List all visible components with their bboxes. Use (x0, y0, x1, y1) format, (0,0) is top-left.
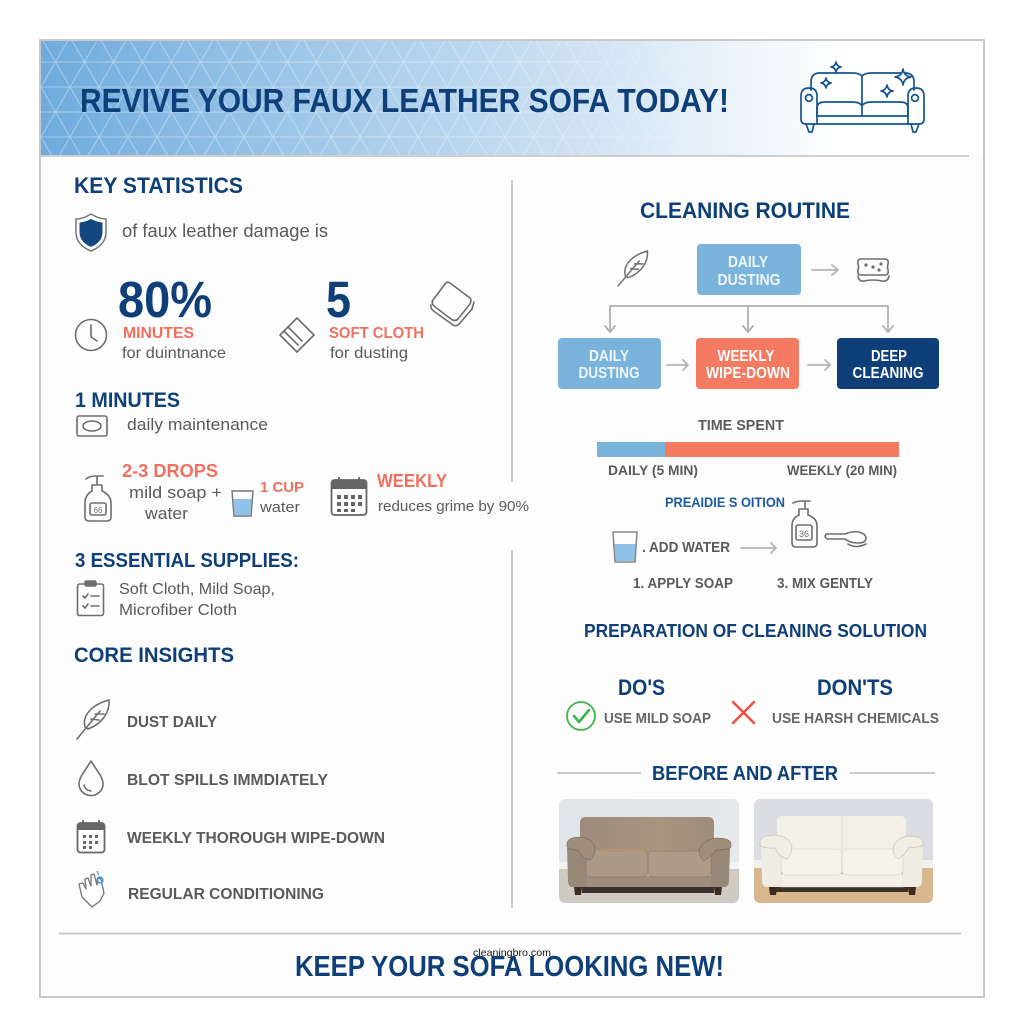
heading: key statistics: KEY STATISTICS (74, 173, 243, 198)
arrow (741, 543, 776, 553)
icon: water drop (79, 761, 103, 796)
panel: preparation steps (584, 494, 927, 641)
stat: 80 percent: 80% (118, 271, 212, 328)
photo: worn sofa before (559, 799, 739, 903)
icon: folded cloth (280, 318, 314, 352)
heading: before and after: BEFORE AND AFTER (652, 763, 839, 785)
column divider (511, 180, 513, 908)
stat: soap dose (85, 461, 222, 523)
label: soft cloth: SOFT CLOTH (329, 325, 424, 342)
heading: preparation: PREPARATION OF CLEANING SOLUTION (584, 621, 927, 641)
stat: weekly: reduces grime by 90% (378, 498, 529, 515)
header banner (41, 41, 983, 157)
icon: clock (76, 320, 106, 350)
stat: weekly: WEEKLY (377, 471, 447, 491)
label: minutes: MINUTES (123, 325, 194, 342)
stat: one cup of water: 1 CUP (260, 479, 304, 496)
icon: sofa with sparkles (801, 62, 924, 132)
flow box: deep cleaning: DEEP (871, 348, 907, 365)
stat: 1 minutes daily maintenance: daily maintenance (127, 415, 268, 434)
stat: 1 minutes daily maintenance: 1 MINUTES (75, 389, 180, 412)
icon: checklist clipboard (78, 581, 104, 616)
connector arrows (605, 306, 893, 332)
flow box: deep cleaning (837, 338, 939, 389)
flow box: daily dusting: DAILY (589, 348, 630, 365)
step: mix gently: 3. MIX GENTLY (777, 576, 873, 592)
text: use harsh chemicals: USE HARSH CHEMICALS (772, 710, 939, 727)
flow box: weekly wipe-down: WIPE-DOWN (706, 365, 790, 382)
flow box: daily dusting (558, 338, 661, 389)
footer tagline: KEEP YOUR SOFA LOOKING NEW! (295, 951, 724, 983)
icon: shield (76, 214, 106, 251)
text: for dusting: for dusting (330, 345, 408, 362)
subheading: PREAIDIE S OITION (665, 494, 785, 510)
icon: hand with droplet (79, 871, 104, 907)
step: apply soap: 1. APPLY SOAP (633, 576, 733, 592)
flow box: daily dusting top (697, 244, 801, 295)
icon: sponge (858, 259, 889, 281)
panel: core insights (74, 644, 385, 907)
text: blot spills: BLOT SPILLS IMMDIATELY (127, 772, 328, 789)
stat: 1 minutes daily maintenance (75, 389, 268, 436)
icon: soap bottle: 36 (799, 529, 809, 539)
step: add water: . ADD WATER (642, 540, 730, 556)
icon: green check (567, 702, 595, 730)
stat: one cup of water: water (259, 499, 300, 516)
panel: cleaning routine flowchart (558, 198, 939, 389)
panel: essential supplies: Microfiber Cloth (119, 602, 237, 619)
icon: water glass (232, 491, 253, 516)
stat: 5: 5 (326, 271, 351, 328)
icon: stacked cloth (431, 282, 474, 326)
icon: feather (618, 251, 648, 286)
icon: feather (77, 700, 109, 739)
panel: essential supplies: Soft Cloth, Mild Soap, (119, 581, 275, 598)
footer (59, 934, 961, 983)
text: weekly wipe-down: WEEKLY THOROUGH WIPE-DOWN (127, 830, 385, 847)
chart: time spent bar: WEEKLY (20 MIN) (787, 462, 897, 478)
text: dust daily: DUST DAILY (127, 714, 217, 731)
panel: before and after (557, 763, 935, 903)
flow box: daily dusting: DUSTING (578, 365, 640, 382)
flow box: deep cleaning: CLEANING (852, 365, 924, 382)
icon: soap bar (77, 416, 107, 436)
panel: key statistics (74, 173, 474, 362)
arrow (667, 360, 688, 370)
panel: essential supplies (75, 550, 299, 619)
heading: core insights: CORE INSIGHTS (74, 644, 234, 667)
panel: dos and donts (567, 675, 939, 730)
icon: calendar (78, 820, 104, 852)
arrow (812, 265, 838, 275)
stat: soap dose: mild soap + (129, 483, 222, 502)
chart: time spent bar: DAILY (5 MIN) (608, 462, 698, 478)
flow box: daily dusting top: DUSTING (718, 272, 780, 289)
heading: dos: DO'S (618, 675, 665, 700)
text: for duintnance: for duintnance (122, 345, 226, 362)
photo: clean sofa after (754, 799, 933, 903)
icon: water glass (613, 532, 637, 562)
icon: red cross (733, 702, 754, 723)
flow box: weekly wipe-down: WEEKLY (718, 348, 775, 365)
arrow (808, 360, 830, 370)
stat: soap dose: 2-3 DROPS (122, 461, 218, 481)
flow box: weekly wipe-down (696, 338, 799, 389)
stat: one cup of water (232, 479, 304, 516)
chart: time spent bar (597, 417, 899, 478)
heading: donts: DON'TS (817, 675, 893, 700)
panel: essential supplies: 3 ESSENTIAL SUPPLIES: (75, 550, 299, 572)
chart: time spent bar: TIME SPENT (698, 417, 784, 434)
stat intro text: of faux leather damage is (122, 221, 328, 241)
icon: spoon (825, 532, 866, 546)
stat: weekly (332, 471, 529, 515)
stat: soap dose: water (144, 504, 188, 523)
icon: soap bottle: 66 (94, 506, 103, 515)
icon: soap bottle (792, 501, 817, 547)
text: use mild soap: USE MILD SOAP (604, 710, 711, 727)
title: REVIVE YOUR FAUX LEATHER SOFA TODAY! (80, 82, 729, 119)
flow box: daily dusting top: DAILY (728, 254, 769, 271)
heading: cleaning routine: CLEANING ROUTINE (640, 198, 850, 223)
text: regular conditioning: REGULAR CONDITIONING (128, 886, 324, 903)
icon: calendar (332, 477, 366, 515)
source credit: cleaningbro.com (473, 947, 551, 959)
